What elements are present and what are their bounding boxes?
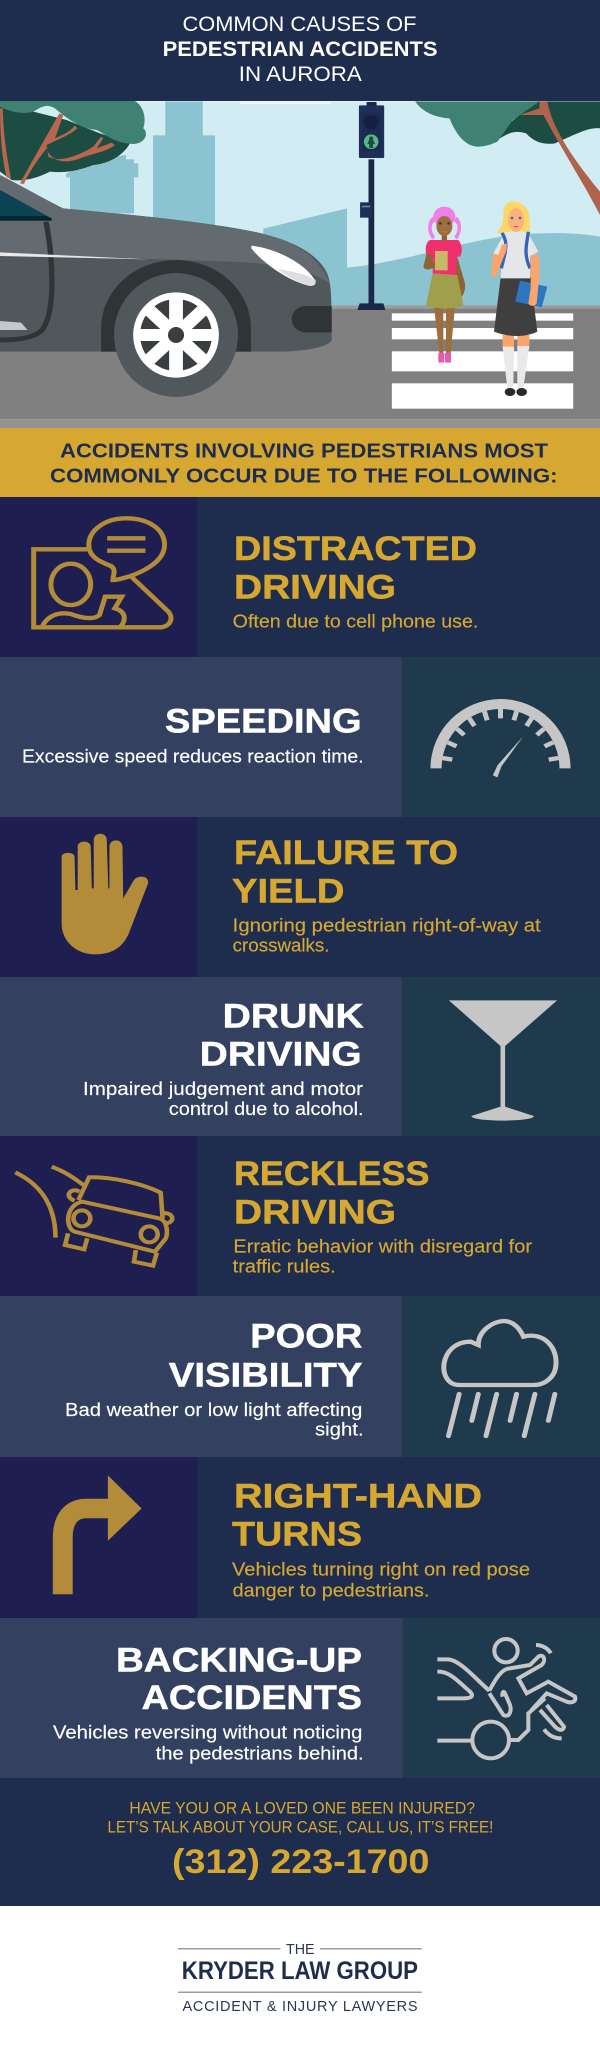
banner: intro heading	[0, 428, 600, 497]
call to action text: LET’S TALK ABOUT YOUR CASE, CALL US, IT’S FREE!	[108, 1817, 493, 1836]
icon: pedestrian hit by car	[437, 1639, 575, 1758]
panel: reckless driving	[0, 1136, 600, 1296]
panel: speeding	[0, 657, 600, 817]
panel: poor visibility	[0, 1296, 600, 1457]
heading: DISTRACTED	[234, 530, 477, 568]
heading	[232, 834, 458, 910]
heading: POOR	[250, 1318, 362, 1356]
title: PEDESTRIAN ACCIDENTS	[163, 38, 438, 61]
panel: distracted driving	[0, 497, 600, 657]
description: crosswalks.	[233, 936, 330, 956]
road	[0, 305, 600, 309]
description	[233, 1236, 532, 1277]
title	[163, 13, 438, 86]
description	[233, 916, 541, 956]
description: Vehicles turning right on red pose	[232, 1560, 530, 1580]
icon: raised hand	[62, 834, 148, 954]
icon: driver with phone	[34, 518, 171, 627]
description: danger to pedestrians.	[233, 1580, 429, 1600]
heading	[232, 1478, 482, 1554]
heading: YIELD	[232, 872, 344, 910]
heading: DRIVING	[200, 1036, 362, 1074]
description	[83, 1079, 364, 1119]
pedestrians	[423, 202, 547, 396]
call to action panel	[0, 1778, 600, 1906]
footer: law firm logo: ACCIDENT & INJURY LAWYERS	[182, 1999, 418, 2015]
description: Bad weather or low light affecting	[65, 1400, 362, 1420]
description: Often due to cell phone use.	[233, 612, 478, 632]
phone number: (312) 223-1700	[172, 1843, 429, 1881]
footer: law firm logo: KRYDER LAW GROUP	[182, 1957, 418, 1985]
panel: backing-up accidents	[0, 1618, 600, 1778]
description	[232, 1560, 530, 1600]
description: Ignoring pedestrian right-of-way at	[233, 916, 541, 936]
banner: intro heading: COMMONLY OCCUR DUE TO THE FOLLOWING:	[50, 464, 558, 487]
icon: right turn arrow	[53, 1475, 142, 1594]
girl with pink hair	[423, 207, 465, 363]
description: the pedestrians behind.	[156, 1743, 364, 1763]
heading: BACKING-UP	[116, 1641, 362, 1679]
heading	[234, 1155, 429, 1231]
footer: law firm logo: THE	[286, 1941, 315, 1958]
car	[0, 175, 332, 397]
heading: DRIVING	[234, 568, 396, 606]
icon: speedometer	[430, 699, 571, 777]
banner: intro heading: ACCIDENTS INVOLVING PEDESTRIANS MOST	[60, 440, 549, 463]
call to action text: HAVE YOU OR A LOVED ONE BEEN INJURED?	[129, 1799, 475, 1818]
girl with blonde hair	[491, 202, 547, 396]
footer: law firm logo	[0, 1906, 600, 2061]
icon: martini glass	[449, 1000, 557, 1121]
icon: rain cloud	[444, 1321, 556, 1436]
header panel	[0, 0, 600, 101]
heading: DRUNK	[223, 997, 364, 1035]
heading: RECKLESS	[234, 1155, 429, 1193]
panel: failure to yield	[0, 817, 600, 977]
description: Excessive speed reduces reaction time.	[22, 747, 364, 767]
right tree, road, crosswalk, car and signal	[0, 101, 600, 428]
heading	[200, 997, 364, 1074]
call to action text	[108, 1799, 493, 1836]
description: control due to alcohol.	[169, 1099, 364, 1119]
traffic signal	[357, 102, 385, 310]
left building and tree	[0, 101, 146, 213]
description	[65, 1400, 364, 1440]
description: Erratic behavior with disregard for	[233, 1236, 532, 1256]
heading: SPEEDING	[165, 703, 362, 741]
heading	[169, 1318, 362, 1395]
description: Impaired judgement and motor	[83, 1079, 363, 1099]
description	[53, 1722, 364, 1763]
icon: swerving car	[15, 1167, 172, 1266]
panel: drunk driving	[0, 977, 600, 1136]
heading: RIGHT-HAND	[234, 1478, 482, 1516]
heading: DRIVING	[234, 1193, 396, 1231]
description: traffic rules.	[233, 1257, 336, 1277]
sky and skyline	[0, 101, 600, 335]
heading: VISIBILITY	[169, 1357, 362, 1395]
description: Vehicles reversing without noticing	[53, 1722, 362, 1742]
illustration: street scene	[0, 101, 600, 428]
description: sight.	[315, 1420, 364, 1440]
heading: FAILURE TO	[234, 834, 458, 872]
panel: right-hand turns	[0, 1457, 600, 1618]
heading	[234, 530, 477, 606]
heading: ACCIDENTS	[142, 1679, 362, 1717]
title: COMMON CAUSES OF	[182, 13, 416, 36]
title: IN AURORA	[239, 63, 362, 86]
heading	[116, 1641, 362, 1717]
crosswalk	[392, 313, 573, 409]
heading: TURNS	[232, 1516, 362, 1554]
